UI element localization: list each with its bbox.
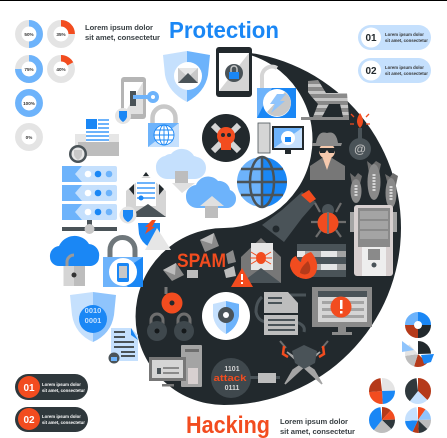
icon: crossed swords and skull	[280, 341, 328, 384]
icon: firewall	[290, 244, 346, 279]
icon: envelope with bug	[241, 238, 281, 283]
icon: tablet with lock	[216, 47, 252, 97]
yin-yang dark shape	[136, 51, 401, 405]
legend pills: hacking	[15, 374, 88, 432]
icon: attack circle: attack	[214, 373, 247, 384]
icon: warning triangle	[231, 268, 253, 287]
icon: bombs	[350, 161, 398, 208]
icon: attack circle: 1101	[224, 366, 240, 373]
legend pills: protection: Lorem ipsum dolor	[385, 32, 424, 37]
icon: bomb at sign: @	[354, 142, 366, 156]
icon: shield with envelope	[163, 51, 210, 102]
text: protection caption: sit amet, consectetur	[85, 33, 160, 42]
icon: cloud download	[156, 149, 206, 193]
legend pills: hacking: sit amet, consectetur	[42, 388, 85, 393]
legend pills: protection: sit amet, consectetur	[385, 71, 428, 76]
icon: open envelope with letter	[126, 172, 166, 217]
icon: shield badge	[120, 206, 136, 224]
text: protection caption: Lorem ipsum dolor	[85, 23, 153, 32]
donut charts group: 100%	[23, 101, 35, 106]
icon: lock with globe	[148, 107, 179, 147]
icon: attack circle: 0111	[225, 385, 240, 392]
icon: usb flashlight	[262, 190, 316, 242]
legend pills: hacking: 01	[23, 383, 35, 394]
icon: shield binary	[70, 292, 116, 342]
donut charts group: 50%	[24, 32, 34, 37]
icon: lock with phone	[103, 238, 143, 287]
legend pills: hacking: sit amet, consectetur	[42, 420, 85, 425]
icon: skull circle	[202, 114, 250, 162]
legend pills: hacking: Lorem ipsum dolor	[42, 414, 81, 419]
icon: server tower	[350, 205, 397, 276]
icon: bomb at sign	[349, 113, 371, 160]
donut charts group: 40%	[56, 67, 66, 72]
legend pills: protection: Lorem ipsum dolor	[385, 65, 424, 70]
icon: desktop computer with lock	[258, 123, 304, 154]
donut charts group: 0%	[26, 135, 32, 140]
legend pills: protection: 01	[365, 33, 377, 44]
icons: spam envelopes	[163, 233, 236, 281]
icon: red padlock	[162, 287, 182, 314]
icon: phone with key	[115, 77, 159, 124]
donut charts group: 35%	[56, 32, 66, 37]
icon: computer and tower	[149, 345, 202, 387]
text: hacking caption	[280, 417, 355, 436]
icon: open padlock with lightning	[257, 67, 296, 118]
icon: server rack	[62, 166, 117, 234]
icon: trojan horse	[301, 80, 349, 120]
title: Protection: Protection	[169, 17, 279, 43]
icon: cloud upload	[186, 177, 236, 218]
icon: bug	[311, 203, 346, 237]
icon: monitor alert	[312, 287, 372, 335]
icon: attack circle	[211, 358, 280, 398]
text: protection caption	[85, 23, 160, 42]
icon: globe	[237, 157, 287, 207]
text: SPAM: SPAM	[177, 251, 226, 272]
legend pills: hacking: 02	[23, 415, 35, 426]
text: hacking caption: sit amet, consectetur	[280, 427, 355, 436]
donut charts group	[18, 23, 72, 148]
icon: cloud with padlock	[50, 236, 99, 286]
legend pills: protection: 02	[365, 66, 377, 77]
icon: bolt shield with warning triangle	[138, 220, 171, 250]
icon: newspaper in tray	[69, 119, 119, 163]
legend pills: protection: sit amet, consectetur	[385, 38, 428, 43]
icon: white circle with shield and gear	[202, 292, 250, 340]
icon: shield binary: 0001	[85, 316, 101, 325]
legend pills: protection	[358, 25, 431, 83]
icons: dark padlocks	[147, 314, 194, 341]
icon: document with snake	[256, 292, 306, 335]
text: hacking caption: Lorem ipsum dolor	[280, 417, 348, 426]
icon: hacker	[310, 132, 345, 180]
donut charts group: 75%	[24, 67, 34, 72]
pie charts	[376, 316, 434, 426]
legend pills: hacking: Lorem ipsum dolor	[42, 382, 81, 387]
icon: shield binary: 0010	[85, 306, 101, 315]
icon: document with lock	[108, 328, 138, 364]
